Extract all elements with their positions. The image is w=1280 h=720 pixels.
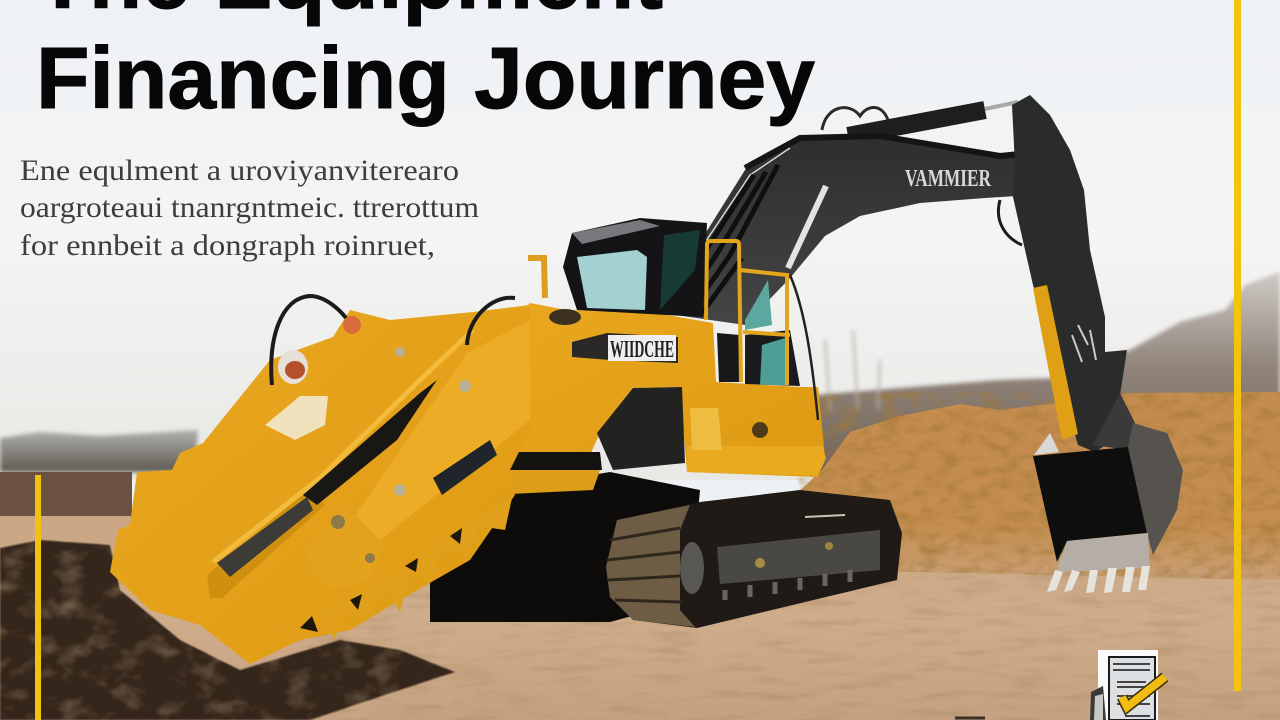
boom brand text: VAMMIER (905, 166, 991, 192)
dark soil (0, 540, 455, 720)
icon: checklist document (1090, 650, 1165, 720)
trencher attachment (110, 296, 530, 664)
boom cylinder and hoses (822, 102, 1018, 136)
excavator bucket (1033, 393, 1183, 593)
intro text block (20, 154, 479, 262)
intro text block: for ennbeit a dongraph roinruet, (20, 229, 435, 262)
excavator stick (998, 95, 1132, 452)
sand texture (790, 392, 1280, 580)
left wall (0, 472, 132, 517)
intro text block: Ene equlment a uroviyanviterearo (20, 154, 459, 187)
title: Financing Journey (36, 30, 815, 127)
right yellow line (1234, 0, 1241, 691)
yellow house body (480, 303, 826, 494)
ground (0, 516, 1280, 720)
exhaust pipe (528, 258, 545, 298)
ground texture (300, 570, 1280, 720)
operator cab (563, 218, 818, 420)
distant tree lines (0, 272, 1280, 480)
sand pile (790, 392, 1280, 585)
excavator (110, 95, 1183, 664)
footer fragment (955, 716, 985, 720)
intro text block: oargroteaui tnanrgntmeic. ttrerottum (20, 191, 479, 224)
cutter teeth (250, 498, 512, 664)
left yellow line (35, 475, 41, 720)
excavator boom (655, 135, 1056, 325)
house brand text: WIIDCHE (610, 337, 674, 363)
crawler track (430, 472, 902, 628)
sky background (0, 0, 1280, 480)
